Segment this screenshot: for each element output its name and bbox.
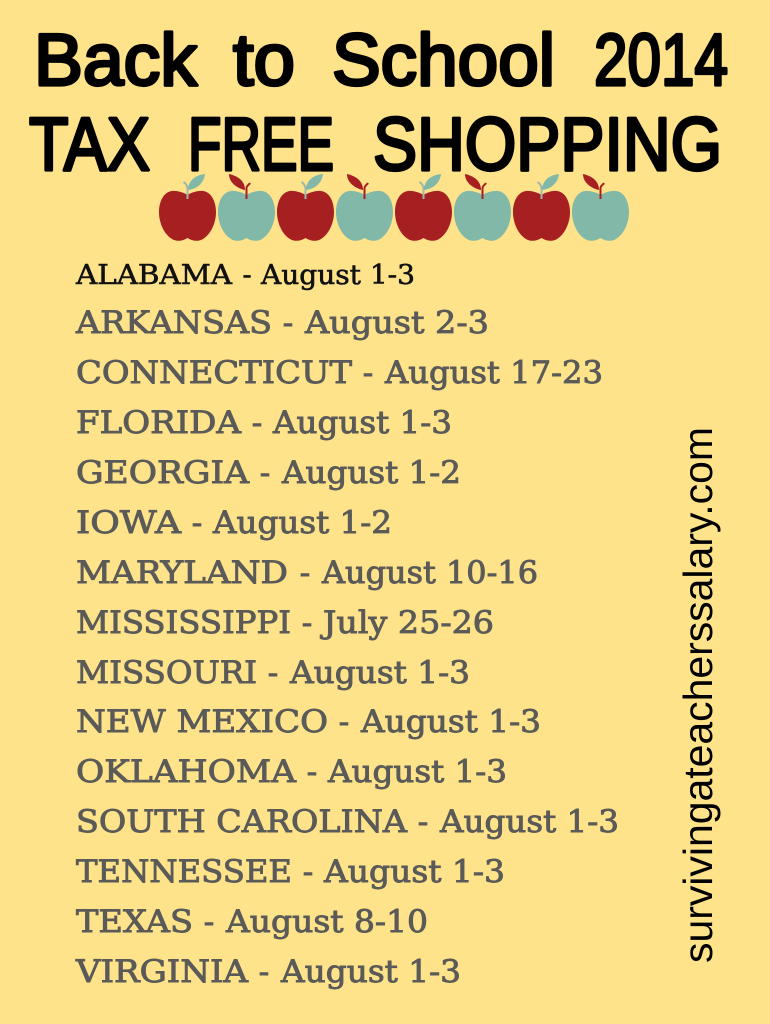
row: Maryland (76, 555, 538, 591)
row: New Mexico: - (339, 704, 349, 740)
row: Oklahoma: OKLAHOMA (76, 754, 297, 790)
row: Virginia (75, 954, 461, 990)
row: Florida: August 1-3 (272, 405, 452, 441)
row: Connecticut: CONNECTICUT (76, 355, 352, 391)
row: Alabama: August 1-3 (260, 260, 415, 291)
row: Texas: August 8-10 (225, 904, 428, 940)
row: Florida (76, 405, 452, 441)
row: Mississippi (76, 605, 494, 641)
row: Alabama (75, 260, 415, 291)
row: Texas (76, 904, 428, 940)
row: South Carolina: SOUTH CAROLINA (76, 804, 408, 840)
row: Connecticut: August 17-23 (384, 355, 603, 391)
row: Florida: - (252, 405, 262, 441)
row: Georgia: - (260, 455, 270, 491)
row: South Carolina (76, 804, 619, 840)
row: Tennessee: - (303, 854, 313, 890)
row: Mississippi: MISSISSIPPI (76, 605, 291, 641)
state list (75, 260, 619, 990)
row: Virginia: August 1-3 (280, 954, 461, 990)
row: Georgia: August 1-2 (281, 455, 461, 491)
row of apples (159, 174, 629, 241)
title: Back to School 2014 (34, 20, 728, 101)
title: Tax Free Shopping (29, 102, 722, 186)
row: Tennessee: TENNESSEE (76, 854, 292, 890)
row: Oklahoma: - (307, 754, 317, 790)
row: New Mexico: NEW MEXICO (76, 704, 328, 740)
row: Oklahoma: August 1-3 (327, 754, 507, 790)
row: Arkansas: August 2-3 (304, 305, 489, 341)
row: Virginia: VIRGINIA (75, 954, 249, 990)
title: Back to School 2014: to (233, 20, 295, 101)
row: New Mexico: August 1-3 (360, 704, 541, 740)
row: Texas: - (204, 904, 214, 940)
row: Iowa (76, 505, 392, 541)
row: Georgia (76, 455, 461, 491)
title: Back to School 2014: School (332, 20, 555, 101)
row: Florida: FLORIDA (76, 405, 242, 441)
row: Arkansas: - (283, 305, 293, 341)
row: Arkansas: ARKANSAS (75, 305, 272, 341)
row: Iowa: August 1-2 (212, 505, 392, 541)
vertical website credit: survivingateacherssalary.com (675, 427, 721, 963)
row: Missouri: August 1-3 (289, 655, 470, 691)
row: Arkansas (75, 305, 489, 341)
row: Connecticut (76, 355, 603, 391)
row: Maryland: - (300, 555, 310, 591)
row: Mississippi: July 25-26 (320, 605, 494, 641)
row: South Carolina: August 1-3 (439, 804, 619, 840)
row: Iowa: IOWA (76, 505, 182, 541)
row: Iowa: - (192, 505, 202, 541)
row: Connecticut: - (363, 355, 373, 391)
title: Tax Free Shopping: FREE (188, 102, 334, 186)
title: Back to School 2014: Back (34, 20, 197, 101)
row: New Mexico (76, 704, 541, 740)
row: Georgia: GEORGIA (76, 455, 250, 491)
title: Tax Free Shopping: SHOPPING (373, 102, 722, 186)
row: Texas: TEXAS (76, 904, 193, 940)
row: Maryland: August 10-16 (321, 555, 538, 591)
row: Tennessee: August 1-3 (323, 854, 505, 890)
row: Missouri: - (268, 655, 278, 691)
row: Alabama: ALABAMA (75, 260, 233, 291)
row: Tennessee (76, 854, 505, 890)
row: Missouri: MISSOURI (76, 655, 257, 691)
row: Oklahoma (76, 754, 507, 790)
title: Tax Free Shopping: TAX (29, 102, 150, 186)
row: Missouri (76, 655, 470, 691)
row: Maryland: MARYLAND (76, 555, 288, 591)
title: Back to School 2014: 2014 (594, 20, 728, 101)
row: South Carolina: - (418, 804, 428, 840)
row: Virginia: - (259, 954, 269, 990)
row: Alabama: - (242, 260, 252, 291)
row: Mississippi: - (302, 605, 312, 641)
